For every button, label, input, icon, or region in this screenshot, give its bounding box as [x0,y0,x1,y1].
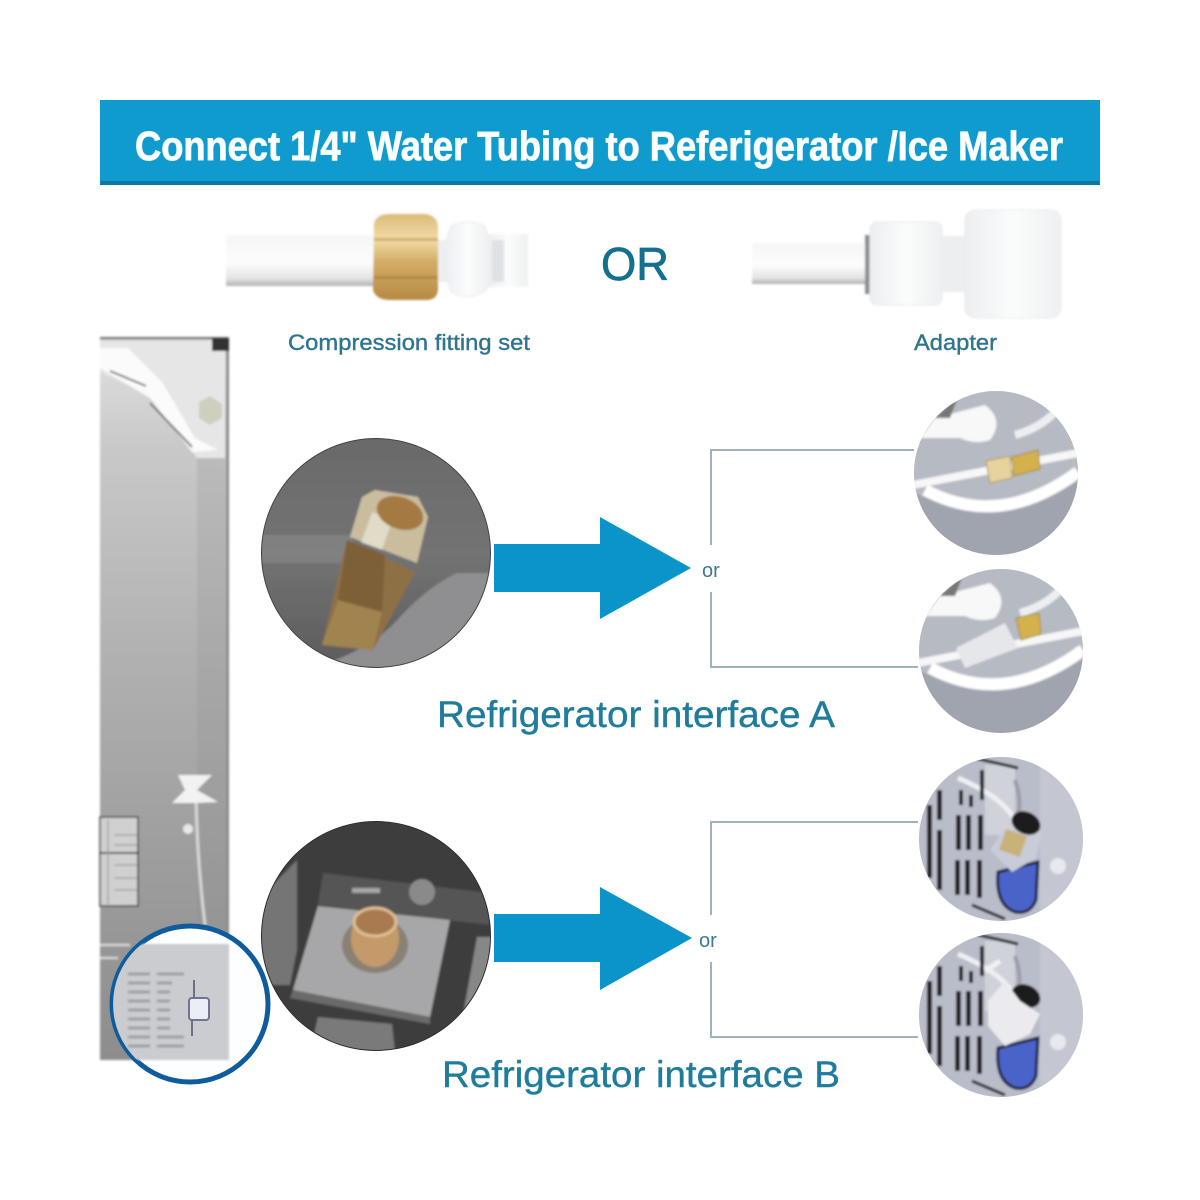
adapter photo [752,210,1061,318]
interface B close-up photo [258,820,495,1052]
or label B: or [699,930,717,952]
caption: adapter: Adapter [914,330,997,355]
OR label: OR [601,238,669,290]
refrigerator back panel [100,337,268,1082]
caption: compression fitting set: Compression fitting set [288,330,530,355]
arrow: interface B [494,887,692,990]
interface A close-up photo [260,438,495,668]
interface B label: Refrigerator interface B [442,1054,840,1095]
connector bracket B [711,822,918,1037]
title: Connect 1/4" Water Tubing to Referigerator /Ice Maker [135,123,1063,169]
interface B option: adapter [918,931,1085,1101]
zoom callout circle [112,926,268,1082]
interface B option: compression fitting [918,755,1085,925]
or label A: or [702,560,720,582]
connector bracket A [711,450,918,667]
interface A option: compression fitting [912,390,1080,558]
interface A option: adapter [917,568,1085,736]
interface A label: Refrigerator interface A [437,694,835,735]
arrow: interface A [494,517,691,619]
title banner [100,100,1100,185]
compression fitting set photo [226,214,528,300]
